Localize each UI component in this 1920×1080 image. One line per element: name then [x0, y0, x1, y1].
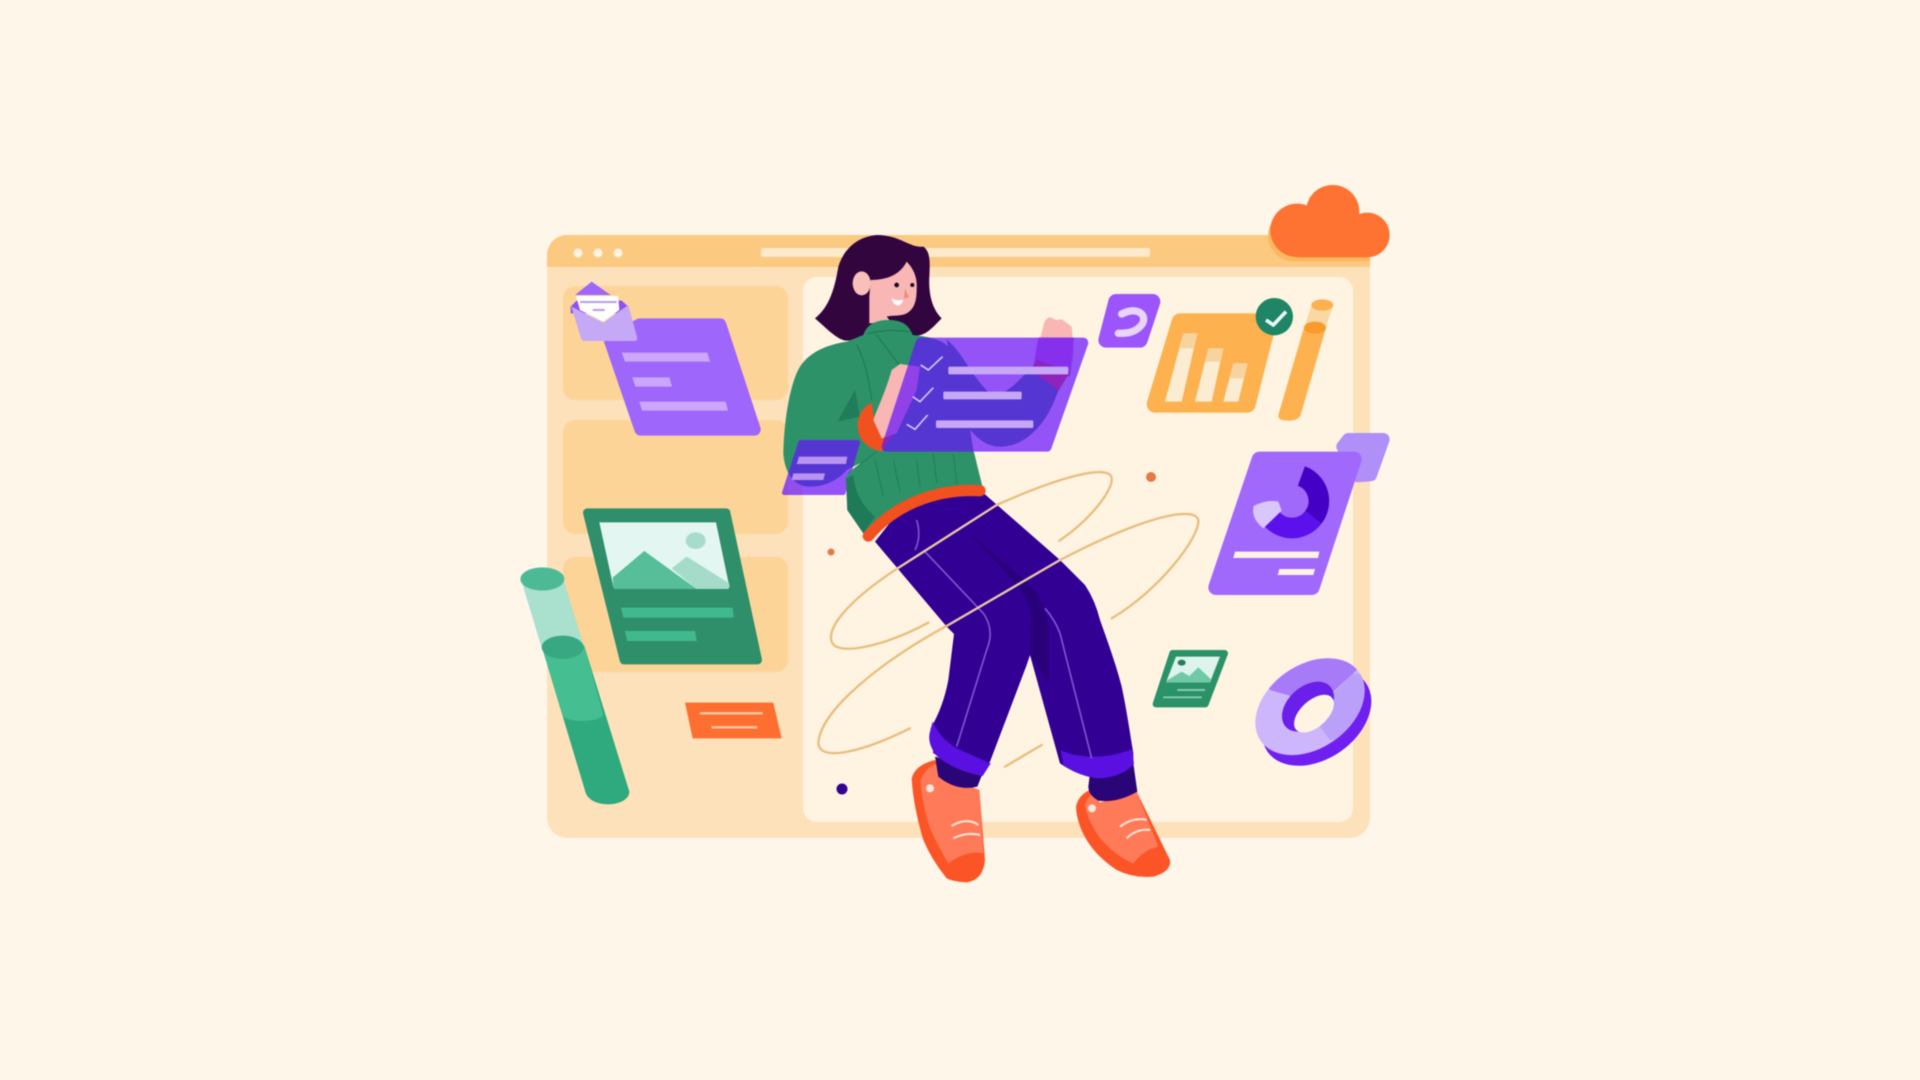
illustration — [520, 184, 1390, 884]
icon: cloud — [1268, 185, 1390, 261]
orange note card — [685, 703, 782, 738]
person: socks and shoes — [912, 757, 1170, 882]
card — [1216, 459, 1354, 587]
3D donut chart — [1254, 658, 1372, 767]
purple card — [610, 325, 754, 429]
sweater folds — [857, 330, 910, 400]
small green image card — [1156, 653, 1225, 704]
cloud body — [1270, 185, 1390, 257]
sleeve — [947, 339, 1058, 447]
person: trousers — [875, 487, 1134, 778]
person: sweater — [783, 320, 977, 487]
caption lines — [621, 608, 734, 641]
bars — [1165, 333, 1248, 402]
right shoe — [1076, 790, 1170, 877]
hand — [1035, 317, 1074, 377]
translucent checklist panel — [887, 343, 1083, 447]
pie chart card — [1216, 439, 1383, 587]
picture — [599, 522, 729, 589]
check marks — [907, 357, 943, 429]
icon: envelope — [571, 282, 637, 341]
sidebar cards — [563, 286, 788, 672]
person: face — [853, 262, 917, 323]
window control dots — [574, 248, 622, 258]
back tab — [1343, 439, 1383, 476]
seams — [915, 520, 1092, 758]
main content area — [803, 277, 1353, 822]
leg shadow — [970, 533, 1048, 683]
chart: green cylinder — [520, 567, 629, 804]
hand shadow under panel — [1033, 337, 1074, 377]
text card: purple with envelope — [571, 282, 754, 429]
pie segments — [1271, 476, 1319, 528]
person: lower sweater — [846, 450, 983, 533]
cloud shadow — [1268, 211, 1370, 261]
left shoe — [912, 760, 985, 882]
panel: browser window — [547, 235, 1370, 838]
cuff — [1027, 360, 1070, 395]
checklist lines — [936, 367, 1068, 428]
icon: purple phone badge — [1106, 302, 1153, 340]
window title bar — [547, 235, 1370, 267]
person: far arm behind panel — [947, 317, 1074, 447]
orbit lines — [818, 472, 1198, 767]
icon: check badge — [1256, 298, 1293, 335]
card text lines — [622, 353, 728, 411]
person: waistband — [868, 490, 980, 536]
chart: orange cylinder — [1278, 299, 1333, 421]
image card: green — [587, 513, 758, 660]
caption lines — [1233, 552, 1319, 575]
decorative dots — [828, 472, 1156, 794]
bar chart: orange card — [1155, 298, 1293, 404]
small translucent panel — [784, 442, 858, 493]
person: hair — [815, 235, 942, 341]
person: near arm and hand — [858, 364, 920, 451]
cuffs — [929, 722, 991, 776]
socks — [935, 757, 983, 788]
address bar — [761, 248, 1150, 257]
